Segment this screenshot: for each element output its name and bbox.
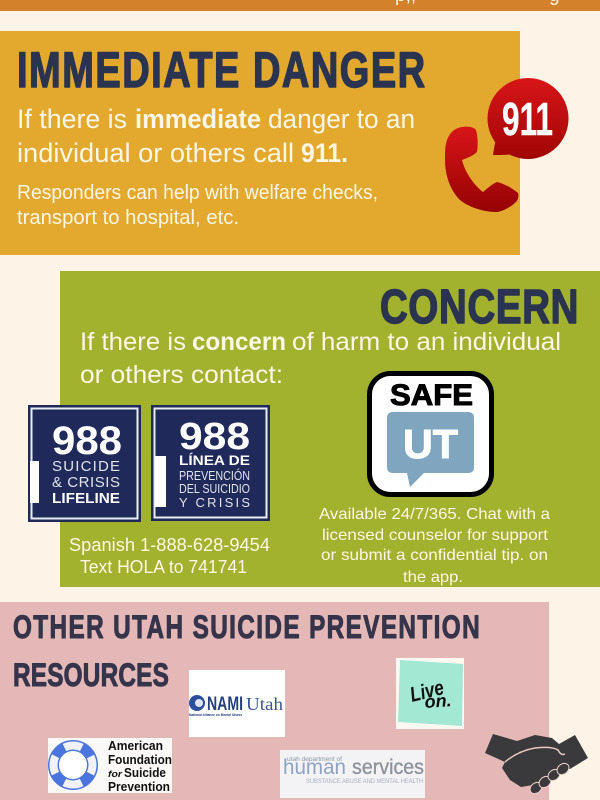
logo: american foundation for suicide prevention — [48, 738, 172, 794]
icon: red telephone handset — [445, 127, 518, 212]
logo: 988 linea de prevencion: 988 — [179, 416, 250, 458]
panel: other resources — [0, 602, 549, 800]
text: immediate danger instruction: If there is — [17, 104, 127, 134]
text: responders — [17, 182, 378, 229]
logo: 988 suicide and crisis lifeline: LIFELINE — [52, 490, 120, 507]
text: concern instruction: If there is — [80, 328, 186, 356]
logo: 988 linea de prevencion — [151, 405, 270, 521]
logo: 988 linea de prevencion: PREVENCIÓN — [179, 468, 250, 483]
logo: american foundation for suicide prevention: Suicide — [124, 765, 166, 780]
text: concern instruction: of harm to an individual — [292, 328, 561, 356]
logo: utah department of human services — [280, 750, 425, 798]
logo: safe ut: SAFE — [390, 379, 473, 412]
logo: 988 suicide and crisis lifeline: 988 — [52, 419, 122, 463]
top banner — [0, 0, 600, 11]
logo: 988 suicide and crisis lifeline: SUICIDE — [52, 458, 120, 475]
logo: 988 linea de prevencion: DEL SUICIDIO — [179, 481, 250, 496]
logo: safe ut — [370, 374, 492, 494]
logo: 988 linea de prevencion: Y CRISIS — [179, 495, 250, 510]
text: concern instruction: or others contact: — [80, 361, 283, 389]
text: responders: Responders can help with welfare checks, — [17, 182, 378, 204]
logo: american foundation for suicide prevention: American — [108, 738, 163, 753]
logo: nami utah: Utah — [246, 694, 283, 714]
logo: 988 linea de prevencion: LÍNEA DE — [179, 453, 250, 468]
text: immediate danger instruction: 911. — [301, 138, 348, 168]
logo: 988 suicide and crisis lifeline — [28, 405, 141, 522]
logo: nami utah: National Alliance on Mental Illness — [189, 713, 242, 717]
logo: safe ut: UT — [403, 421, 458, 467]
text: immediate danger instruction: danger to an — [268, 104, 415, 134]
text: concern instruction — [80, 328, 561, 389]
text: safeut description: Available 24/7/365. Chat with a — [319, 506, 550, 523]
text: spanish contact — [69, 535, 270, 577]
text: responders: transport to hospital, etc. — [17, 207, 239, 229]
logo: nami utah: NAMI — [207, 694, 243, 715]
panel: immediate danger — [0, 31, 520, 255]
heading: other utah suicide prevention resources: OTHER UTAH SUICIDE PREVENTION — [13, 610, 480, 646]
text: immediate danger instruction — [17, 104, 415, 168]
logo: 988 suicide and crisis lifeline: & CRISIS — [52, 474, 120, 491]
heading: other utah suicide prevention resources: RESOURCES — [13, 658, 169, 694]
text: safeut description: licensed counselor for support — [322, 527, 549, 544]
logo: live on — [396, 658, 464, 729]
icon: 911 speech bubble: 911 — [502, 93, 553, 145]
logo: live on: Live — [408, 676, 446, 707]
text: concern instruction: concern — [192, 328, 286, 356]
text: immediate danger instruction: immediate — [135, 104, 261, 134]
heading: immediate danger: IMMEDIATE DANGER — [17, 43, 425, 98]
heading: other utah suicide prevention resources — [13, 610, 480, 694]
logo: american foundation for suicide prevention: Foundation — [108, 752, 172, 767]
text: safeut description — [319, 506, 550, 586]
text: spanish contact: Text HOLA to 741741 — [80, 557, 247, 577]
logo: american foundation for suicide prevention: Prevention — [108, 779, 170, 794]
text: safeut description: the app. — [403, 569, 463, 586]
logo: utah department of human services: utah department of — [287, 756, 342, 763]
logo: utah department of human services: services — [352, 756, 424, 779]
text: safeut description: or submit a confidential tip. on — [321, 547, 548, 564]
heading: concern: CONCERN — [380, 281, 578, 334]
logo: nami utah — [189, 670, 285, 737]
logo: utah department of human services: SUBSTANCE ABUSE AND MENTAL HEALTH — [306, 779, 423, 785]
text: immediate danger instruction: individual or others call — [17, 138, 294, 168]
logo: utah department of human services: human — [283, 756, 346, 779]
logo: american foundation for suicide prevention: for — [108, 769, 123, 779]
icon: 911 speech bubble — [488, 78, 568, 159]
panel: concern — [60, 271, 600, 587]
text: spanish contact: Spanish 1-888-628-9454 — [69, 535, 270, 555]
logo: live on: on. — [424, 690, 452, 712]
icon: handshake — [485, 734, 588, 796]
